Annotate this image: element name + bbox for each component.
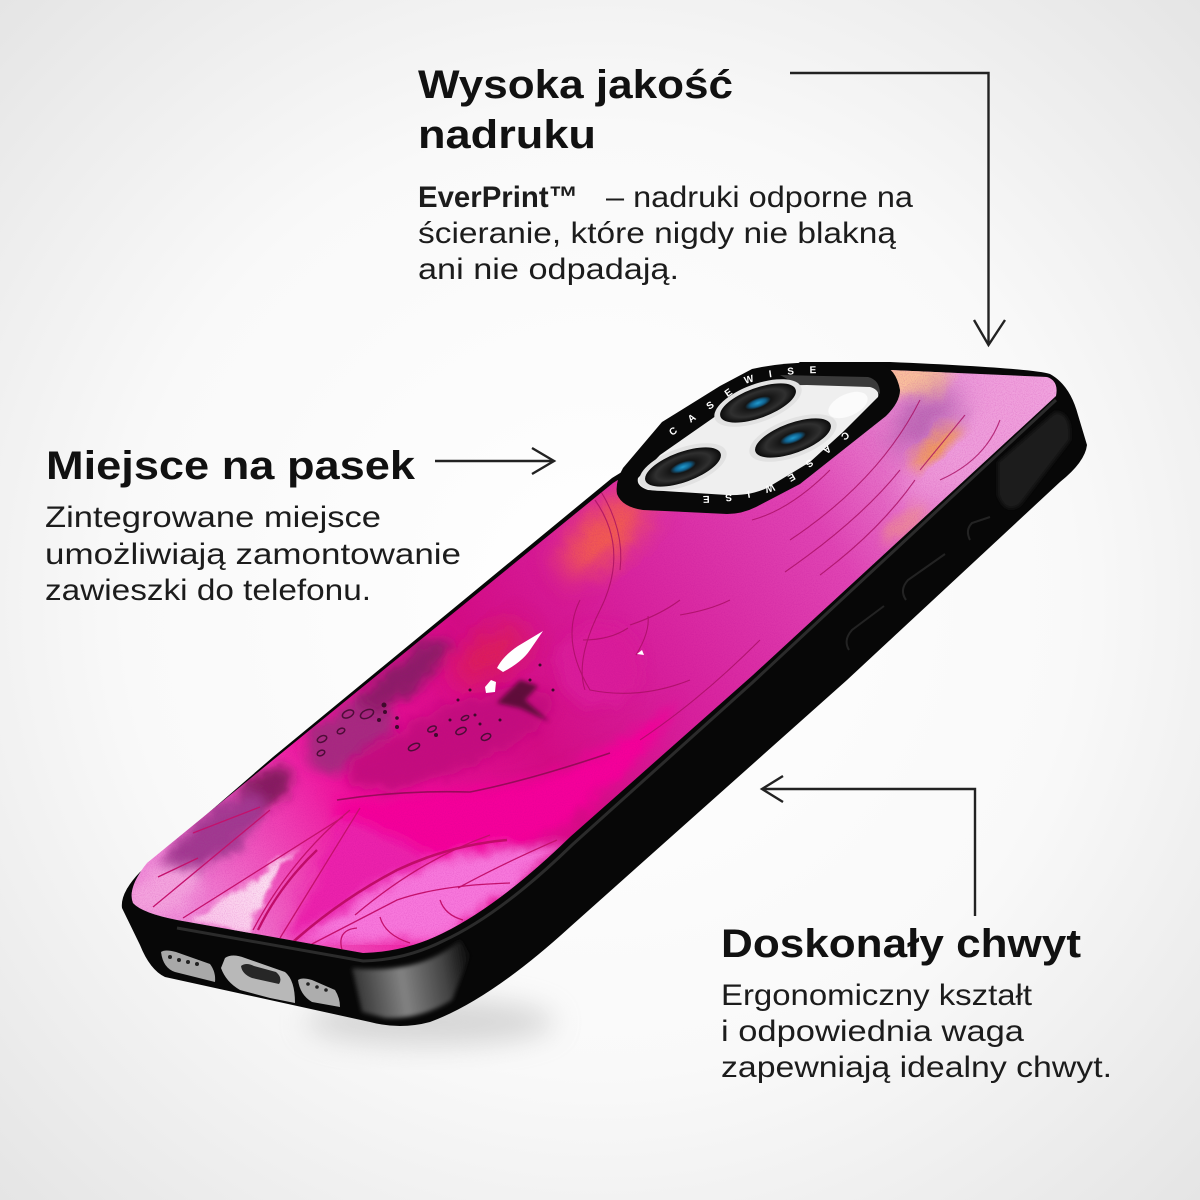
body text: i odpowiednia waga: [721, 1015, 1024, 1048]
dark ink splash: [497, 680, 550, 722]
bottom speaker right: [298, 978, 340, 1007]
peach top: [891, 370, 958, 402]
arrow: to print: [790, 73, 1005, 345]
bright pink sweep: [331, 708, 673, 858]
white paint splash: [497, 631, 543, 672]
deep band: [344, 684, 552, 797]
white streak: [190, 845, 303, 932]
pale lower right: [293, 845, 570, 942]
purple shadow left: [153, 786, 271, 878]
printed back artwork: [132, 370, 1057, 953]
speaker left holes: [168, 955, 199, 966]
water drop rings: [316, 707, 492, 757]
charging port: [221, 956, 295, 1003]
watercolour washes: [122, 357, 1062, 945]
camera ring text bottom: CASEWISE: [703, 432, 849, 503]
orange under camera: [549, 482, 661, 588]
speaker right holes: [306, 982, 328, 992]
dark purple blot: [354, 634, 458, 715]
callout: strap slot: [45, 444, 461, 607]
thick fan line: [293, 840, 507, 942]
body text: Zintegrowane miejsce: [45, 501, 381, 534]
body text: [418, 181, 913, 286]
body text: umożliwiają zamontowanie: [45, 538, 461, 571]
ink lines: [572, 400, 1000, 740]
heading: Doskonały chwyt: [721, 922, 1081, 966]
case body: [122, 362, 1087, 1026]
heading: nadruku: [418, 113, 596, 157]
heading: Miejsce na pasek: [46, 444, 416, 488]
phone shadow: [305, 998, 555, 1046]
flash: [824, 386, 872, 424]
paper grain: [132, 370, 1056, 952]
camera window: [638, 385, 878, 495]
heading: Wysoka jakość: [418, 63, 733, 107]
body text: EverPrint™: [418, 181, 578, 214]
heading: [418, 63, 733, 157]
magenta blob right of splash: [558, 647, 602, 704]
body text: zapewniają idealny chwyt.: [721, 1051, 1112, 1084]
side buttons: [847, 517, 990, 650]
small white splash: [485, 680, 496, 693]
lens left: [633, 433, 733, 501]
phone case: [122, 362, 1087, 1026]
mauve drop area: [298, 690, 404, 782]
body text: [721, 979, 1112, 1084]
arrow: to grip: [762, 776, 975, 916]
dark corner: [232, 758, 300, 818]
lower right orange hint: [879, 500, 931, 550]
bottom speaker left: [161, 950, 215, 982]
body text: ani nie odpadają.: [418, 253, 679, 286]
camera ring text top: CASEWISE: [670, 366, 816, 435]
small white dot: [637, 650, 644, 655]
charging port opening: [241, 964, 280, 984]
dark curve: [337, 753, 610, 800]
corner highlight: [352, 940, 470, 1018]
callout: print quality: [418, 63, 913, 286]
purple haze: [880, 378, 970, 462]
mid pink fan: [285, 815, 440, 945]
body text: ścieranie, które nigdy nie blakną: [418, 217, 896, 250]
light pink right edge: [900, 375, 1050, 512]
thick fan line two: [258, 850, 317, 930]
camera window shade: [780, 375, 880, 394]
red glow: [445, 616, 535, 694]
side bump: [998, 412, 1070, 508]
body text: Ergonomiczny kształt: [721, 979, 1033, 1012]
pale left corner: [132, 858, 205, 918]
arrow: to strap slot: [435, 448, 554, 474]
camera surround: [617, 363, 900, 514]
body text: zawieszki do telefonu.: [45, 574, 371, 607]
lens top: [708, 369, 808, 437]
ink dots: [377, 664, 554, 737]
orange streak: [907, 420, 963, 474]
callout: grip: [721, 922, 1112, 1084]
camera island: [616, 363, 900, 514]
body text: [45, 501, 461, 607]
lens right: [743, 404, 843, 472]
side rim sheen: [177, 400, 1056, 961]
fan lines: [153, 807, 557, 953]
body text: – nadruki odporne na: [606, 181, 913, 214]
